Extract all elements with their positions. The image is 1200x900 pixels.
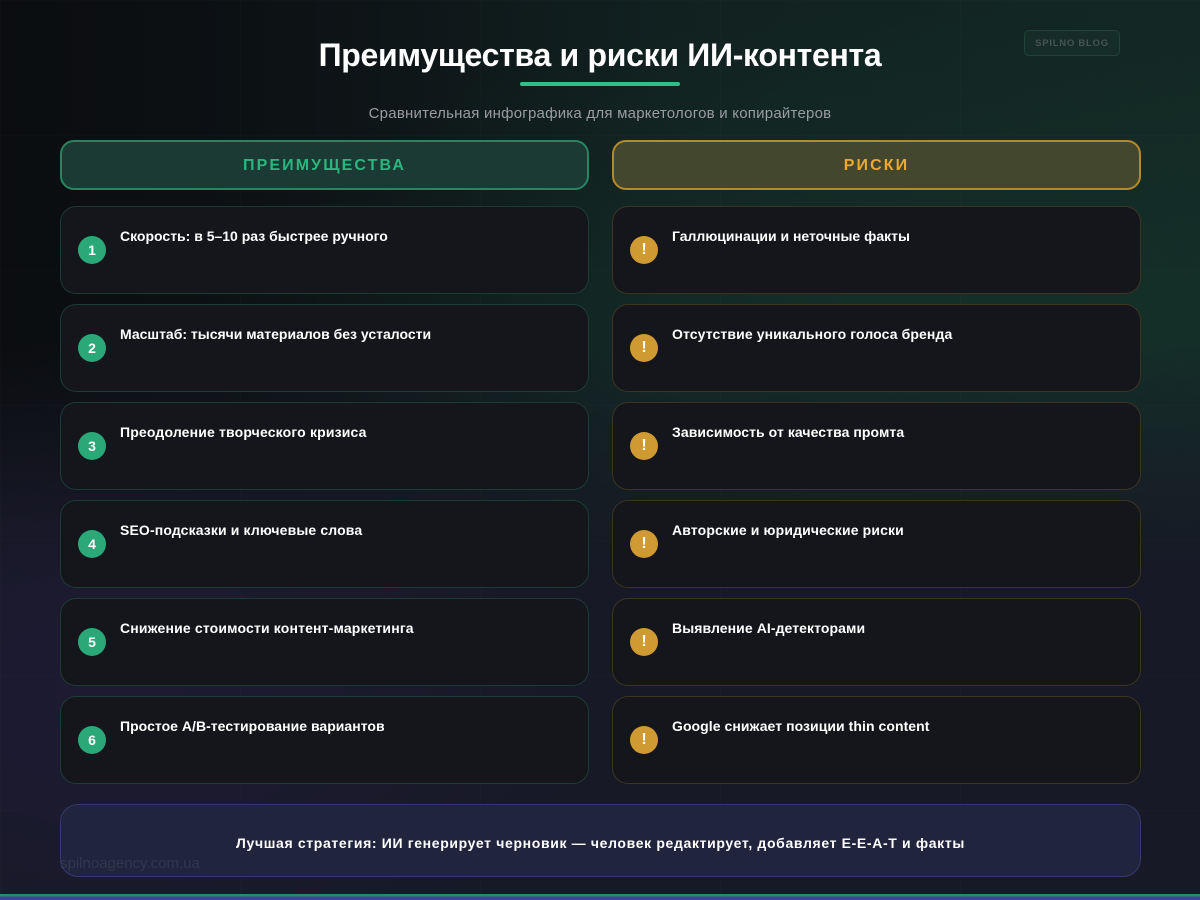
risk card 6: Google снижает позиции thin content (672, 718, 929, 734)
watermark: spilnoagency.com.ua (60, 855, 200, 872)
risk card 5 (612, 598, 1141, 686)
subtitle: Сравнительная инфографика для маркетологов и копирайтеров (369, 105, 831, 122)
advantage card 3: 3 (88, 438, 96, 454)
risk card 1: Галлюцинации и неточные факты (672, 228, 910, 244)
advantage card 4: SEO-подсказки и ключевые слова (120, 522, 362, 538)
brand badge: SPILNO BLOG (1035, 38, 1109, 49)
risk card 5: ! (641, 633, 647, 650)
advantage card 6: Простое A/B-тестирование вариантов (120, 718, 385, 734)
advantage card 1: Скорость: в 5–10 раз быстрее ручного (120, 228, 388, 244)
risk card 3 (612, 402, 1141, 490)
header: advantages (60, 140, 589, 190)
header: risks (612, 140, 1141, 190)
risk card 3: ! (641, 437, 647, 454)
risk card 6 (612, 696, 1141, 784)
advantage card 5: Снижение стоимости контент-маркетинга (120, 620, 414, 636)
header: risks: РИСКИ (844, 157, 909, 174)
risk card 4: Авторские и юридические риски (672, 522, 904, 538)
advantage card 6 (60, 696, 589, 784)
advantage card 1 (60, 206, 589, 294)
advantage card 2: 2 (88, 340, 96, 356)
title: Преимущества и риски ИИ-контента (319, 37, 881, 73)
advantage card 1: 1 (88, 242, 96, 258)
header: advantages: ПРЕИМУЩЕСТВА (243, 157, 406, 174)
bottom accent bar (0, 894, 1200, 900)
risk card 4: ! (641, 535, 647, 552)
advantage card 5 (60, 598, 589, 686)
risk card 6: ! (641, 731, 647, 748)
strategy banner (60, 804, 1141, 877)
risk card 5: Выявление AI-детекторами (672, 620, 865, 636)
advantage card 3: Преодоление творческого кризиса (120, 424, 367, 440)
advantage card 5: 5 (88, 634, 96, 650)
risk card 3: Зависимость от качества промта (672, 424, 904, 440)
advantage card 3 (60, 402, 589, 490)
advantage card 4: 4 (88, 536, 96, 552)
advantage card 4 (60, 500, 589, 588)
risk card 1: ! (641, 241, 647, 258)
advantage card 2 (60, 304, 589, 392)
advantage card 6: 6 (88, 732, 96, 748)
risk card 2: ! (641, 339, 647, 356)
risk card 4 (612, 500, 1141, 588)
title underline (520, 82, 680, 86)
risk card 2 (612, 304, 1141, 392)
risk card 1 (612, 206, 1141, 294)
risk card 2: Отсутствие уникального голоса бренда (672, 326, 952, 342)
brand badge (1024, 30, 1120, 56)
strategy banner: Лучшая стратегия: ИИ генерирует черновик — человек редактирует, добавляет E-E-A-T и факты (236, 835, 965, 851)
advantage card 2: Масштаб: тысячи материалов без усталости (120, 326, 431, 342)
